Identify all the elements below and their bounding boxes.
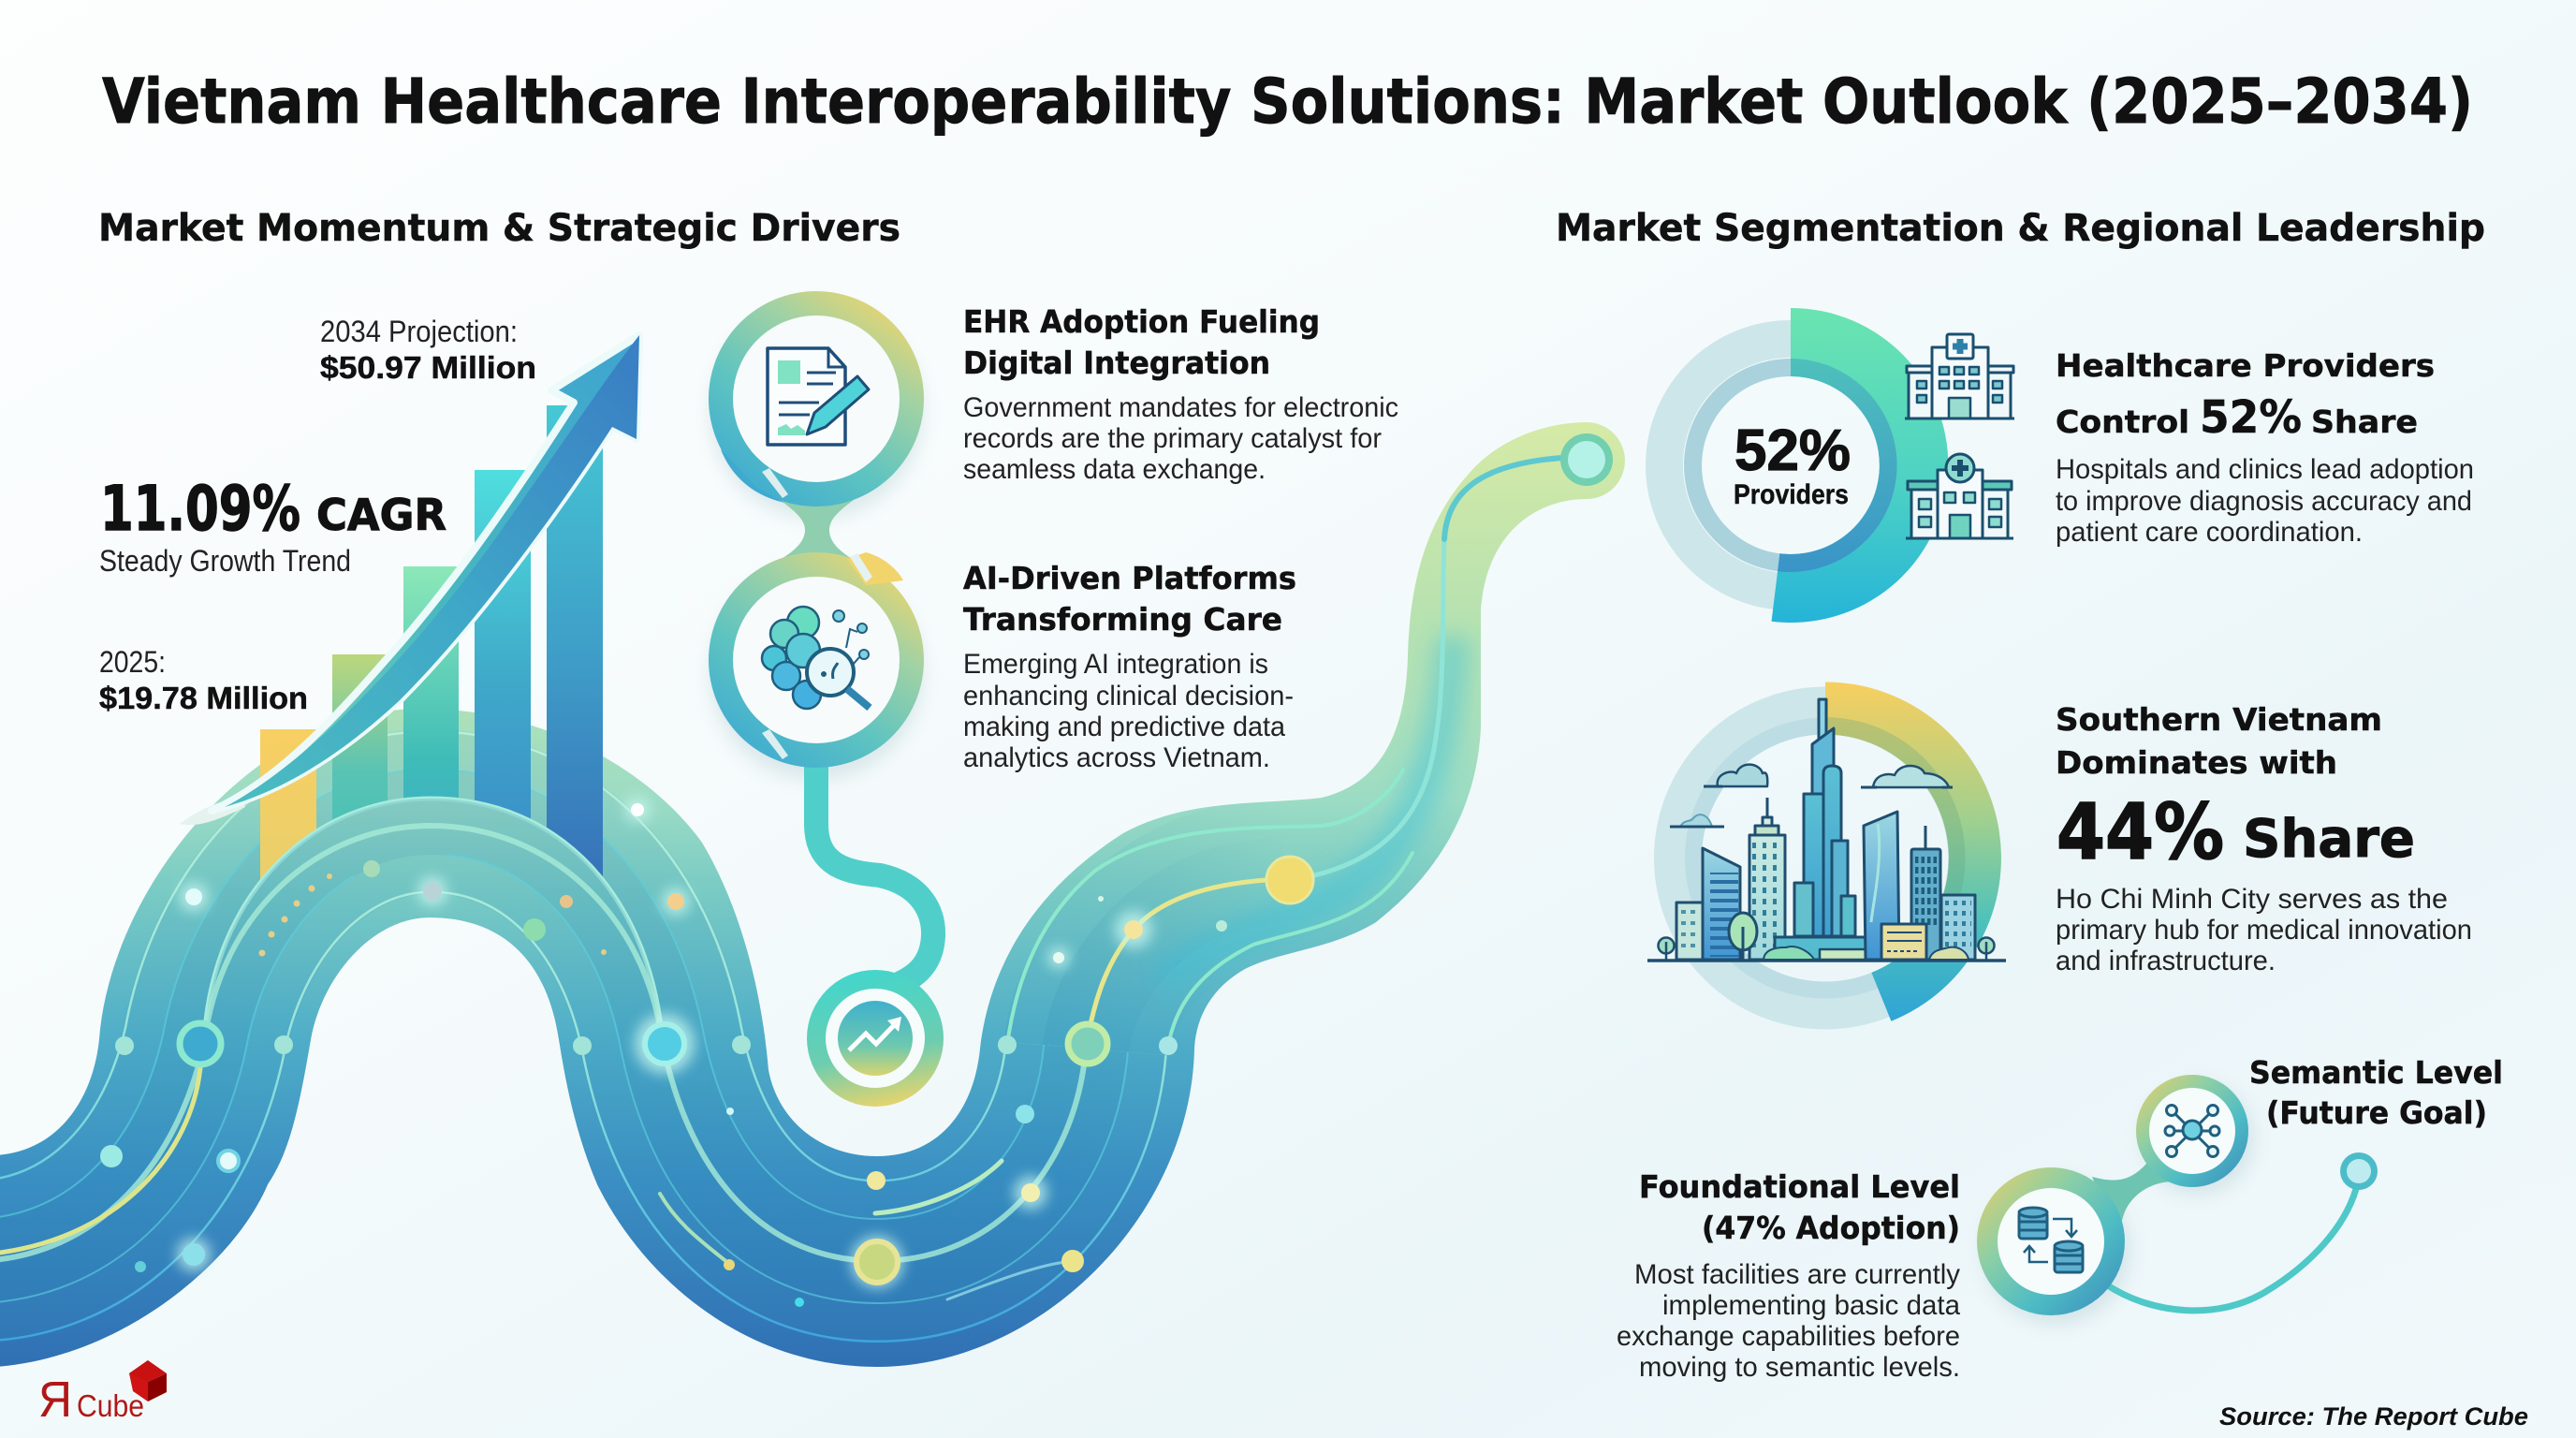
connector stem [768, 492, 933, 989]
text: healthcare providers: Share [2311, 404, 2418, 440]
text: healthcare providers: 52% [2200, 391, 2302, 444]
text: EHR adoption: records are the primary catalyst for [963, 423, 1382, 454]
icon: EHR document and pen [768, 348, 869, 445]
icon: hospital one [1905, 334, 2014, 418]
text: southern vietnam: Southern Vietnam [2056, 701, 2382, 738]
heading: market momentum: Market Momentum & Strategic Drivers [98, 207, 900, 250]
text: healthcare providers: Hospitals and clinics lead adoption [2056, 454, 2474, 485]
text: semantic level: (Future Goal) [2266, 1094, 2487, 1131]
ribbon nodes [100, 797, 1313, 1307]
text: southern vietnam: Share [2243, 809, 2415, 870]
text: AI platforms: enhancing clinical decision- [963, 681, 1294, 712]
text: healthcare providers: Control [2056, 404, 2189, 440]
node: foundational level [1977, 1167, 2125, 1315]
text: EHR adoption: EHR Adoption Fueling [963, 303, 1320, 340]
donut chart: 52% providers: 52% [1734, 418, 1851, 483]
text: AI platforms: making and predictive data [963, 712, 1285, 742]
stat: 2034 projection: 2034 Projection: [320, 315, 518, 348]
text: EHR adoption: Government mandates for electronic [963, 392, 1398, 423]
icon: AI brain [762, 607, 870, 709]
growth bar chart [260, 405, 603, 889]
text: EHR adoption: seamless data exchange. [963, 454, 1266, 485]
growth arrow [180, 335, 639, 825]
ring: EHR [709, 291, 924, 506]
text: semantic level [2249, 1054, 2503, 1131]
ring: trend arrow [807, 970, 944, 1107]
logo: RCube: Я [38, 1372, 72, 1428]
text: AI platforms: analytics across Vietnam. [963, 742, 1270, 773]
stat: 2025 value: 2025: [99, 645, 166, 679]
regional ring chart: 44% [1677, 682, 2001, 1021]
stat: 2025 value [99, 645, 308, 715]
text: EHR adoption: Digital Integration [963, 345, 1270, 381]
logo: RCube [38, 1360, 167, 1428]
text: foundational level: (47% Adoption) [1702, 1210, 1960, 1246]
stat: CAGR [99, 473, 446, 578]
text: semantic level: Semantic Level [2249, 1054, 2503, 1091]
inner arch band [204, 796, 663, 1275]
text: AI platforms: Transforming Care [963, 601, 1282, 638]
text: foundational level: Most facilities are currently [1634, 1259, 1960, 1290]
clouds [1670, 765, 1953, 827]
icon: city skyline [1647, 699, 2006, 961]
text: AI platforms [963, 560, 1296, 773]
interoperability levels diagram [1977, 1075, 2378, 1325]
driver connector chain [709, 291, 944, 1107]
link line to goal [2106, 1152, 2378, 1311]
icon: hospital two [1906, 454, 2013, 538]
text: AI platforms: AI-Driven Platforms [963, 560, 1296, 596]
text: southern vietnam: and infrastructure. [2056, 946, 2276, 976]
text: southern vietnam [2056, 701, 2472, 976]
ring: AI [709, 552, 924, 768]
stat: CAGR: CAGR [316, 490, 446, 540]
text: foundational level: moving to semantic levels. [1639, 1352, 1960, 1383]
text: AI platforms: Emerging AI integration is [963, 649, 1268, 680]
stat: CAGR: Steady Growth Trend [99, 544, 351, 578]
logo: RCube: Cube [77, 1388, 144, 1423]
donut chart: 52% providers: Providers [1734, 479, 1849, 510]
text: foundational level [1617, 1168, 1960, 1383]
source note: Source: The Report Cube [2219, 1402, 2528, 1431]
stat: CAGR: 11.09% [100, 473, 300, 545]
text: southern vietnam: Ho Chi Minh City serves as the [2056, 884, 2448, 915]
text: healthcare providers: to improve diagnosis accuracy and [2056, 486, 2472, 517]
text: southern vietnam: 44% [2056, 788, 2224, 877]
donut chart: 52% providers [1664, 308, 1948, 623]
heading: market segmentation: Market Segmentation & Regional Leadership [1556, 207, 2485, 250]
text: southern vietnam: Dominates with [2056, 744, 2337, 781]
stat: 2034 projection: $50.97 Million [320, 350, 536, 385]
node: semantic level [2136, 1075, 2248, 1187]
text: healthcare providers: patient care coordination. [2056, 517, 2363, 548]
text: foundational level: exchange capabilities before [1617, 1321, 1960, 1352]
text: foundational level: Foundational Level [1639, 1168, 1960, 1205]
stat: 2025 value: $19.78 Million [99, 681, 308, 715]
flowing data ribbon [0, 405, 1625, 1404]
text: healthcare providers: Healthcare Providers [2056, 347, 2435, 384]
text: southern vietnam: primary hub for medical innovation [2056, 915, 2472, 946]
stat: 2034 projection [320, 315, 536, 385]
text: foundational level: implementing basic data [1662, 1290, 1960, 1321]
ribbon end node [1560, 433, 1613, 486]
text: healthcare providers [2056, 347, 2474, 548]
text: EHR adoption [963, 303, 1398, 485]
ribbon tail rails [0, 458, 1562, 1299]
